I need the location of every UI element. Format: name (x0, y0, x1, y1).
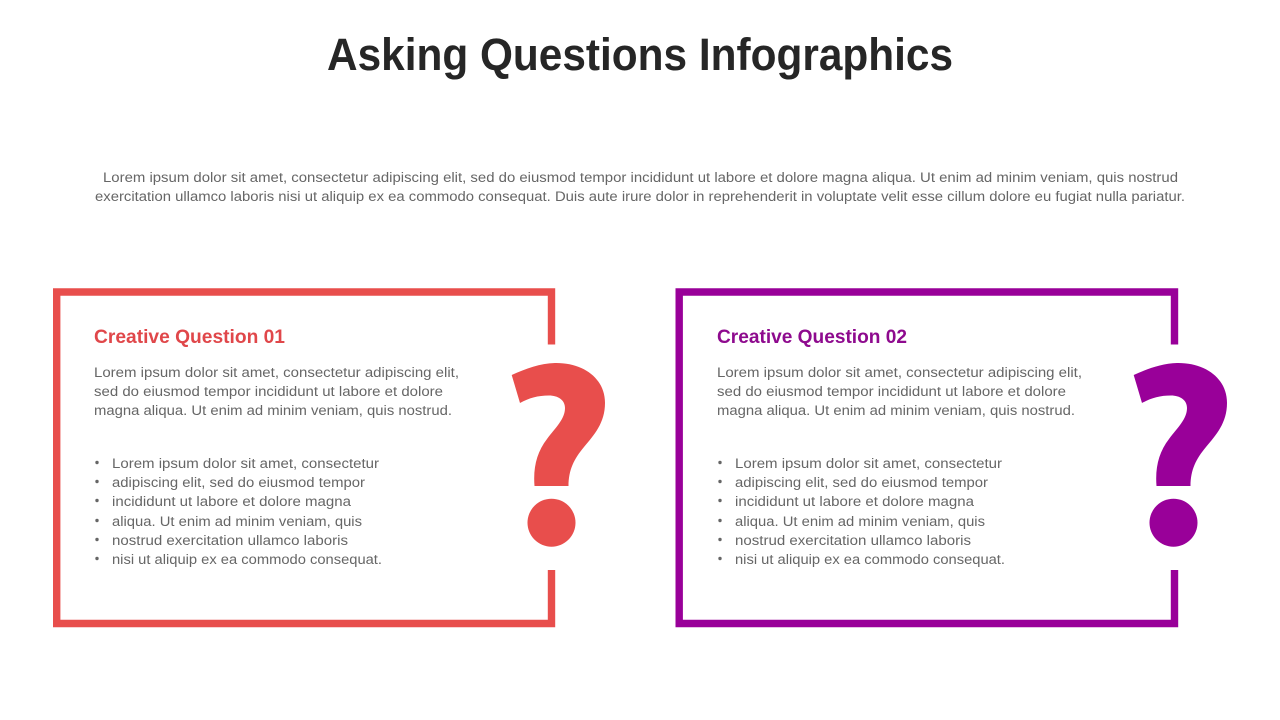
paragraph: question 02: sed do eiusmod tempor incididunt ut labore et dolore (717, 384, 1066, 399)
paragraph: question 01 (94, 365, 459, 418)
bullet list: question 01: Lorem ipsum dolor sit amet, consectetur (112, 456, 380, 471)
paragraph: question 02: magna aliqua. Ut enim ad minim veniam, quis nostrud. (717, 403, 1075, 418)
red frame (57, 292, 551, 624)
bullet list: question 02: nisi ut aliquip ex ea commodo consequat. (735, 552, 1005, 567)
bullet list: question 02: aliqua. Ut enim ad minim veniam, quis (735, 514, 985, 529)
intro text: exercitation ullamco laboris nisi ut aliquip ex ea commodo consequat. Duis aute irure dolor in reprehenderit in voluptate velit esse cillum dolore eu fugiat nulla pariatur. (95, 189, 1185, 204)
paragraph: question 02: Lorem ipsum dolor sit amet, consectetur adipiscing elit, (717, 365, 1082, 380)
panel: creative question 01 (57, 292, 605, 624)
title: Asking Questions Infographics (327, 29, 953, 80)
bullet list: question 02: nostrud exercitation ullamco laboris (735, 533, 971, 548)
paragraph: question 01: magna aliqua. Ut enim ad minim veniam, quis nostrud. (94, 403, 452, 418)
paragraph: question 01: sed do eiusmod tempor incididunt ut labore et dolore (94, 384, 443, 399)
bullet list: question 01: nisi ut aliquip ex ea commodo consequat. (112, 552, 382, 567)
panel: creative question 02 (679, 292, 1227, 624)
bullet list: question 02: adipiscing elit, sed do eiusmod tempor (735, 475, 989, 490)
bullet list: question 01: nostrud exercitation ullamco laboris (112, 533, 348, 548)
bullet list: question 01 (95, 456, 382, 567)
bullet list: question 02 (718, 456, 1005, 567)
icon: purple question mark (1134, 363, 1227, 547)
bullet list: question 02: incididunt ut labore et dolore magna (735, 494, 975, 509)
icon: red question mark (512, 363, 605, 547)
bullet list: question 01: adipiscing elit, sed do eiusmod tempor (112, 475, 366, 490)
bullet list: question 02: Lorem ipsum dolor sit amet, consectetur (735, 456, 1003, 471)
bullet list: question 01: incididunt ut labore et dolore magna (112, 494, 352, 509)
heading: question 01: Creative Question 01 (94, 327, 285, 348)
intro text (95, 170, 1185, 204)
paragraph: question 01: Lorem ipsum dolor sit amet, consectetur adipiscing elit, (94, 365, 459, 380)
paragraph: question 02 (717, 365, 1082, 418)
intro text: Lorem ipsum dolor sit amet, consectetur adipiscing elit, sed do eiusmod tempor incididunt ut labore et dolore magna aliqua. Ut enim ad minim veniam, quis nostrud (103, 170, 1178, 185)
heading: question 02: Creative Question 02 (717, 327, 907, 348)
purple frame (679, 292, 1174, 624)
bullet list: question 01: aliqua. Ut enim ad minim veniam, quis (112, 514, 362, 529)
